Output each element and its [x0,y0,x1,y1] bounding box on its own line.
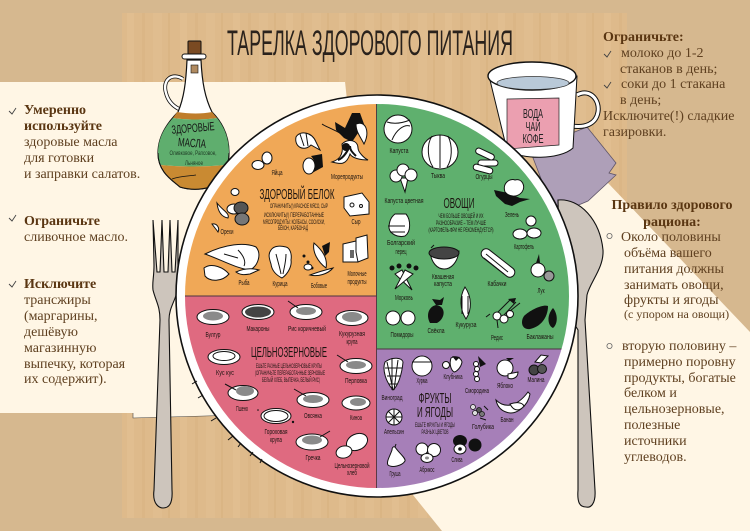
advice: exclude trans fats: (маргарины, [24,309,98,324]
food: banana: Банан [500,417,514,424]
food: tomatoes: Помидоры [390,332,414,339]
food: pear: Груша [390,471,401,478]
food: eggs: Яйца [272,169,283,177]
text block: healthy diet rule: белком и [624,386,677,401]
text block: drinks advice [603,30,734,140]
food: bell pepper: Болгарский [387,239,415,247]
text block: healthy diet rule: Около половины [621,230,721,245]
food: beans [302,242,333,290]
food: pumpkin: Тыква [431,173,445,180]
food: oatmeal: Овсянка [304,413,322,420]
food: millet: Пшено [236,406,248,413]
text block: healthy diet rule: источники [624,434,687,449]
text block: healthy diet rule: рациона: [643,215,701,230]
food: dairy [343,235,368,286]
food: onion: Лук [538,288,545,295]
food: apricot [416,443,440,474]
food: corn grits: Кукурузная [339,331,365,338]
food: bell pepper [387,214,415,256]
food: brown rice [288,301,326,333]
heading: vegetables: ОВОЩИ [444,195,474,212]
text block: healthy diet rule: цельнозерновые, [624,402,725,417]
plate [176,95,578,497]
panel: healthy protein [204,113,369,290]
food: couscous [208,350,240,377]
food: dairy: Молочные [348,271,367,278]
food: apple: Яблоко [497,382,513,390]
food: greens [494,180,530,219]
food: grapes [382,358,403,402]
cream paper right [413,183,750,531]
food: oatmeal [294,389,329,420]
food: fish: Рыба [238,279,250,287]
note: fruit advice [415,423,455,436]
heading: fruits and berries: ФРУКТЫ [418,390,452,407]
panel: vegetables [384,115,557,342]
food: sauerkraut [429,245,459,288]
food: wholegrain bread: Цельнозерновой [334,462,370,470]
food: cucumbers [473,147,498,181]
food: zucchini [479,247,517,288]
food: grapes: Виноград [382,395,402,402]
food: blueberry [470,404,494,431]
food: dairy: продукты [348,279,366,286]
food: shrimp [296,133,320,150]
food: strawberry [442,356,463,381]
text block: healthy diet rule: продукты, богатые [624,371,736,386]
advice: moderate use: Умеренно [24,103,86,118]
icon: oil bottle: Оливковое, Рапсовое, [170,151,217,157]
advice: moderate use: и заправки салатов. [24,167,140,182]
food: plum [452,435,482,464]
icon: spoon [558,200,603,507]
note: protein advice: ИСКЛЮЧИТЬ(!) ПЕРЕРАБОТАННЫЕ [264,213,324,219]
food: currant: Смородина [465,388,489,395]
food: bulgur: Булгур [206,332,221,339]
advice: exclude trans fats: выпечку, которая [24,357,126,372]
food: pea groats: крупа [270,437,282,444]
food: seafood: Морепродукты [331,174,363,181]
note: fruit advice: РАЗНЫХ ЦВЕТОВ [422,430,448,436]
food: eggplants [522,306,557,341]
food: radish [486,298,520,342]
advice: exclude trans fats: Исключите [24,277,96,292]
text block: healthy diet rule: Правило здорового [611,198,733,213]
text block: healthy diet rule: фрукты и ягоды [624,293,719,308]
food: pear [387,444,405,478]
text block: fats advice [9,103,140,387]
food: corn grits [336,310,368,346]
text block: healthy diet rule: полезные [624,418,680,433]
panel: fruits and berries [382,355,548,478]
icon: mug: ЧАЙ [526,119,540,134]
icon: oil bottle: ЗДОРОВЫЕ [171,119,215,137]
text block: healthy diet rule: примерно поровну [624,355,736,370]
icon: fork [153,220,178,508]
food: cheese [344,193,369,226]
food: plum: Слива [452,457,463,464]
food: corn grits: крупа [346,339,358,346]
text block: drinks advice: Ограничьте: [603,30,684,45]
icon: mug: ВОДА [523,106,543,121]
cream paper left [0,82,347,413]
icon: napkin [530,127,616,215]
text block: healthy diet rule: углеводов. [624,450,687,465]
text block: healthy diet rule: занимать овощи, [624,278,724,293]
food: cauliflower [384,164,424,205]
food: cauliflower: Капуста цветная [384,198,424,205]
note: fruit advice: ЕШЬТЕ ФРУКТЫ И ЯГОДЫ [415,423,455,429]
food: sauerkraut: Квашеная [432,274,454,281]
food: sauerkraut: капуста [434,281,452,288]
food: cheese: Сыр [352,219,361,226]
note: vegetable advice: ЧЕМ БОЛЬШЕ ОВОЩЕЙ И ИХ [438,212,484,220]
text block: drinks advice: в день; [620,93,661,108]
heading: whole grains: ЦЕЛЬНОЗЕРНОВЫЕ [251,344,327,361]
note: vegetable advice [428,212,494,234]
text block: healthy diet rule: питания должны [624,262,725,277]
food: banana [496,392,530,424]
food: persimmon: Хурма [416,378,428,385]
text block: healthy diet rule: (с упором на овощи) [624,307,729,321]
text block: drinks advice: Исключите(!) сладкие [603,109,734,124]
text block: drinks advice: молоко до 1-2 [621,46,704,61]
food: couscous: Кус кус [216,370,234,377]
paper edge [133,410,240,418]
food: buckwheat: Гречка [306,455,321,462]
food: greens: Зелень [505,212,519,219]
text block: healthy diet rule [607,198,737,465]
wood table [122,13,627,518]
note: grain advice: ЕШЬТЕ РАЗНЫЕ ЦЕЛЬНОЗЕРНОВЫЕ КРУПЫ [256,364,322,370]
food: wholegrain bread [334,430,370,477]
icon: mug: КОФЕ [522,131,544,146]
food: potatoes: Картофель [514,244,534,251]
food: bulgur [197,310,229,339]
food: persimmon [412,356,432,385]
note: grain advice: БЕЛЫЙ ХЛЕБ, ВЫПЕЧКА, БЕЛЫЙ РИС) [262,376,320,384]
icon: oil bottle [158,41,229,189]
advice: exclude trans fats: их содержит). [24,372,107,387]
food: pearl barley [337,355,372,385]
food: corn [456,287,477,329]
food: strawberry: Клубника [444,373,463,381]
food: corn: Кукуруза [456,322,477,329]
food: pearl barley: Перловка [345,378,367,385]
advice: exclude trans fats: магазинную [24,341,96,356]
advice: exclude trans fats: дешёвую [24,325,78,340]
note: protein advice [263,204,328,232]
advice: moderate use [24,103,140,182]
food: beet [428,297,445,335]
advice: moderate use: используйте [24,119,102,134]
food: raspberry [528,355,548,384]
note: grain advice: (ОГРАНИЧЬТЕ ПЕРЕРАБОТАННЫЕ ЗЕРНОВЫЕ [255,371,325,377]
food: nuts [212,188,249,236]
food: eggplants: Баклажаны [526,334,554,341]
food: radish: Редис [491,335,503,342]
food: cabbage [384,115,412,155]
food: potatoes [513,216,541,251]
food: currant [465,356,489,395]
food: chicken [269,246,291,288]
icon: oil bottle: МАСЛА [178,135,206,151]
food: apple [497,358,518,390]
food: chicken: Курица [272,281,288,288]
icon: mug [488,62,598,157]
food: brown rice: Рис коричневый [288,325,326,333]
icon: oil bottle: Льняное [185,161,203,167]
food: pasta [242,304,274,333]
food: nuts: Орехи [220,229,234,236]
text block: healthy diet rule: объёма вашего [624,246,712,261]
advice: exclude trans fats [24,277,126,387]
food: raspberry: Малина [528,377,545,384]
food: buckwheat [296,431,330,462]
food: caviar [303,154,323,174]
heading: fruits and berries [417,390,453,421]
advice: exclude trans fats: трансжиры [24,293,91,308]
heading: fruits and berries: И ЯГОДЫ [417,404,453,421]
panel: whole grains [197,301,372,477]
food: cabbage: Капуста [390,148,409,155]
food: quinoa: Киноа [350,415,362,422]
heading: healthy protein: ЗДОРОВЫЙ БЕЛОК [260,185,335,203]
advice: moderate use: здоровые масла [24,135,118,150]
food: bell pepper: перец [396,249,406,256]
food: beans: Бобовые [311,282,327,290]
note: protein advice: ОГРАНИЧИТЬ(!) КРАСНОЕ МЯСО, СЫР [270,204,328,210]
text block: drinks advice: газировки. [603,125,666,140]
advice: limit butter [24,214,128,245]
food: wholegrain bread: хлеб [347,469,357,477]
food: orange: Апельсин [384,429,404,436]
food: blueberry: Голубика [472,423,494,431]
advice: limit butter: Ограничьте [24,214,100,229]
note: vegetable advice: (КАРТОФЕЛЬ-ФРИ НЕ РЕКОМЕНДУЕТСЯ) [428,228,494,234]
food: pasta: Макароны [246,326,270,333]
food: eggs [252,152,283,177]
food: quinoa [342,396,370,422]
food: carrots: Морковь [395,295,413,302]
food: pea groats [257,408,294,444]
food: pea groats: Гороховая [264,429,288,436]
text block: drinks advice: соки до 1 стакана [621,77,726,92]
text block: drinks advice: стаканов в день; [620,62,717,77]
advice: limit butter: сливочное масло. [24,230,128,245]
advice: moderate use: для готовки [24,151,95,166]
food: apricot: Абрикос [420,466,435,474]
text block: healthy diet rule: вторую половину – [622,339,737,354]
note: vegetable advice: РАЗНООБРАЗИЕ – ТЕМ ЛУЧШЕ [436,221,486,227]
food: seafood [322,113,368,181]
food: beet: Свёкла [428,328,445,335]
note: protein advice: БЕКОН, КАРБОНАД [278,226,308,232]
food: cucumbers: Огурцы [476,174,492,181]
food: orange [384,409,404,436]
food: millet [225,384,258,413]
food: zucchini: Кабачки [488,280,507,288]
food: pumpkin [422,135,458,180]
note: protein advice: МЯСОПРОДУКТЫ: КОЛБАСЫ, СОСИСКИ, [263,220,325,226]
note: grain advice [255,364,325,384]
check marks [9,108,16,287]
food: onion [531,254,554,295]
food: tomatoes [386,311,415,339]
food: fish [204,244,259,287]
food: carrots [390,264,418,302]
